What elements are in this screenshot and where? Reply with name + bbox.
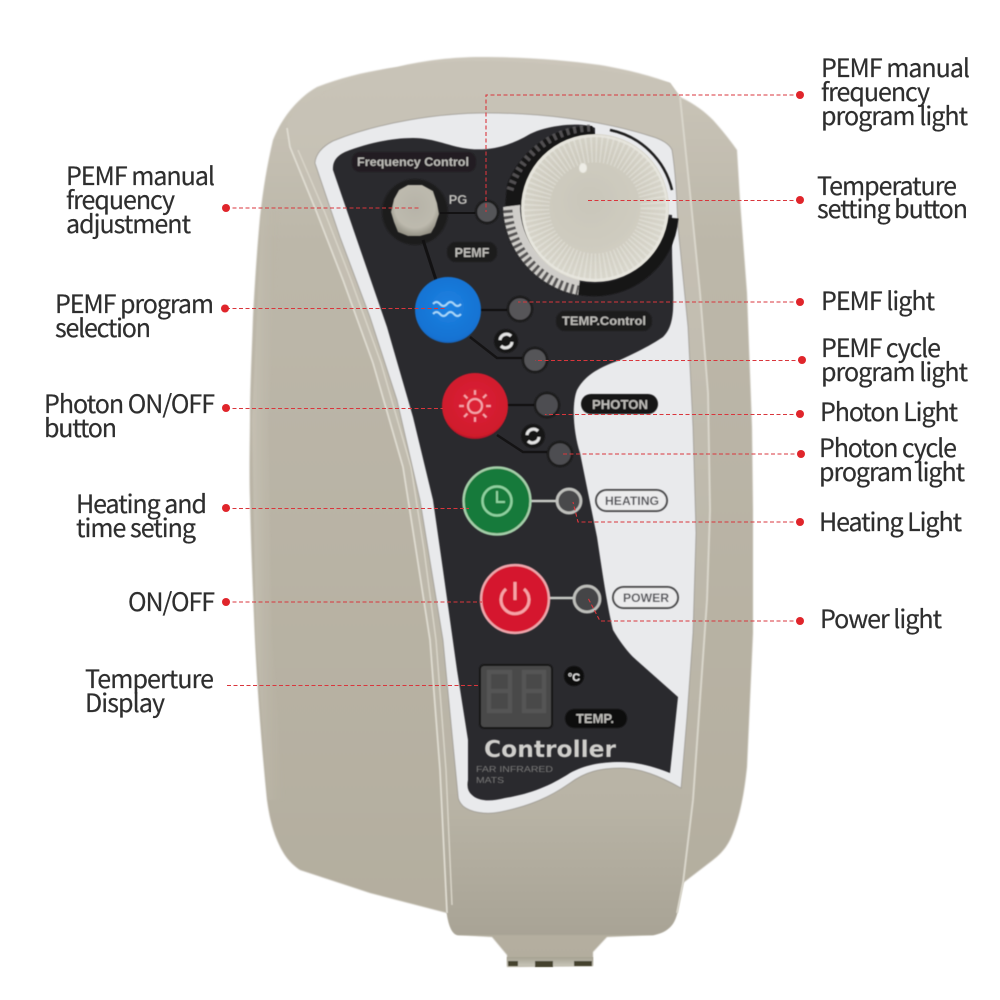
label: Heating and time seting: time seting [76,509,196,545]
photon button [442,373,548,452]
temperature knob [521,134,669,282]
label: Temperature setting button: setting button [817,190,968,226]
PG indicator light [476,201,498,223]
label: PEMF program selection: PEMF program [55,285,214,321]
far infrared mats caption: MATS [476,775,504,785]
connector foot [507,957,593,967]
label: PEMF manual frequency adjustment: adjustment [66,205,192,241]
photon cycle light [548,442,572,466]
label: PEMF manual frequency program light: PEMF manual [821,49,970,85]
label: PEMF program selection: selection [55,309,151,345]
photon label: PHOTON [592,397,648,412]
label: Heating Light: Heating Light [819,503,963,539]
far infrared mats caption [476,764,553,785]
label: PEMF light: PEMF light [821,282,936,318]
temperature display [479,664,553,729]
raised front panel [287,61,710,935]
power button [481,565,576,633]
label: PEMF cycle program light [821,329,969,389]
frequency control label [352,152,476,172]
label: PEMF manual frequency program light [821,49,970,133]
PG label: PG [449,192,467,207]
white control panel [315,113,696,813]
label: Photon ON/OFF button [44,385,215,445]
callout lines [226,95,802,686]
label: Temperture Display: Display [85,684,165,720]
device body [250,57,753,967]
power label [613,587,678,608]
label: Photon cycle program light: program light [819,453,966,489]
label: PEMF manual frequency adjustment: frequency [66,181,175,217]
label: Heating and time seting [76,485,207,545]
label: Temperature setting button [817,167,968,226]
PEMF label: PEMF [455,246,490,260]
heating button [464,468,558,534]
TEMP control label: TEMP.Control [562,314,646,328]
TEMP label [565,709,627,728]
label: Photon Light: Photon Light [820,393,959,429]
heating light [557,489,581,513]
callout dots [221,91,806,625]
PEMF cycle icon [494,329,518,353]
degrees Celsius icon [564,666,584,686]
heating label [596,490,667,511]
label: PEMF program selection [55,285,214,345]
adjustment knob [382,179,448,245]
label: PEMF manual frequency program light: frequency [821,73,930,109]
photon cycle icon [521,424,545,448]
label: PEMF cycle program light: PEMF cycle [821,329,941,365]
PEMF label [447,242,497,262]
label: Photon ON/OFF button: button [44,409,117,445]
PEMF light [508,297,532,321]
label: PEMF cycle program light: program light [821,353,969,389]
heating label: HEATING [605,494,659,508]
photon label [581,394,658,414]
label: Photon ON/OFF button: Photon ON/OFF [44,385,215,421]
label: Temperature setting button: Temperature [817,167,957,203]
power light [574,586,600,612]
dark control graphic [333,125,678,800]
label: PEMF manual frequency adjustment: PEMF manual [66,157,215,193]
label: ON/OFF: ON/OFF [128,583,215,619]
panel crease highlights [287,128,447,913]
frequency control label: Frequency Control [357,155,469,169]
label: Photon cycle program light: Photon cycle [819,429,957,465]
left side shading [252,210,285,800]
temperature scale ring [503,126,672,295]
label: Temperture Display: Temperture [85,660,214,696]
label: PEMF manual frequency adjustment [66,157,215,241]
TEMP label: TEMP. [576,712,614,726]
label: Photon cycle program light [819,429,966,489]
far infrared mats caption: FAR INFRARED [476,764,553,774]
controller wordmark: Controller [484,737,617,763]
controller device [250,57,753,967]
label: Temperture Display [85,660,214,720]
label: Power light: Power light [820,600,943,636]
blue PEMF button [415,240,525,358]
TEMP control label [556,311,652,331]
PEMF cycle light [523,348,547,372]
label: Heating and time seting: Heating and [76,485,207,521]
power label: POWER [623,591,669,605]
photon light [535,393,559,417]
PG link [440,212,476,214]
degrees Celsius icon: °C [568,672,580,684]
label: PEMF manual frequency program light: program light [821,97,969,133]
